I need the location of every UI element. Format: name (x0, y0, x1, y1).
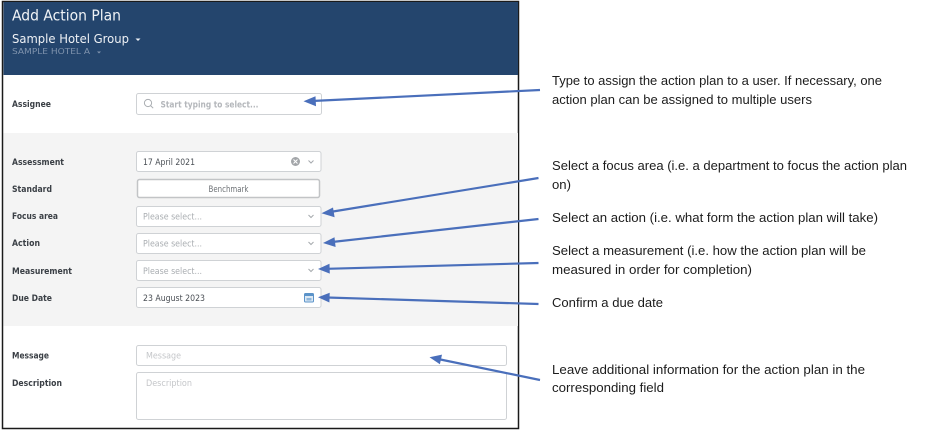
measurement row: Measurement (12, 267, 73, 277)
icon: search (144, 99, 153, 108)
measurement row: Please select... (143, 267, 202, 277)
action row: Please select... (143, 240, 202, 250)
assignee row: Assignee (12, 100, 51, 110)
note: focus area (552, 159, 907, 192)
panel: add action plan form (2, 2, 518, 428)
message row: Message (12, 352, 49, 362)
arrow: measurement (318, 263, 538, 274)
note: measurement: Select a measurement (i.e. how the action plan will be (552, 244, 866, 258)
note: focus area: on) (552, 178, 571, 192)
icon: calendar (304, 294, 314, 302)
note: assignee: action plan can be assigned to multiple users (552, 93, 812, 107)
hotel selector: SAMPLE HOTEL A (12, 47, 91, 56)
message row (12, 346, 506, 366)
note: measurement (552, 244, 866, 277)
arrow: due date (318, 293, 538, 304)
note: due date: Confirm a due date (552, 296, 663, 310)
action row: Action (12, 239, 40, 249)
note: assignee (552, 74, 882, 107)
grey section (4, 133, 518, 326)
action row (12, 234, 321, 254)
measurement row (12, 260, 321, 280)
standard row: Benchmark (208, 185, 249, 195)
heading: Add Action Plan: Add Action Plan (12, 6, 121, 24)
focus area row: Focus area (12, 212, 58, 222)
assessment row: 17 April 2021 (143, 158, 195, 168)
note: assignee: Type to assign the action plan to a user. If necessary, one (552, 74, 882, 88)
standard row: Standard (12, 185, 52, 195)
note: measurement: measured in order for completion) (552, 263, 752, 277)
note: message and description (552, 363, 865, 395)
hotel group selector: Sample Hotel Group (12, 31, 129, 46)
assignee row (12, 94, 322, 114)
assignee row: Start typing to select... (160, 100, 258, 110)
focus area row (12, 206, 321, 226)
arrow: action (323, 219, 538, 247)
focus area row: Please select... (143, 212, 202, 222)
assessment row: Assessment (12, 158, 65, 168)
note: message and description: Leave additional information for the action plan in the (552, 363, 865, 377)
arrow: message (430, 355, 540, 380)
message row: Message (146, 352, 181, 362)
arrow: assignee (304, 90, 540, 106)
description row: Description (12, 379, 62, 389)
description row (12, 372, 506, 420)
due date row: Due Date (12, 294, 52, 304)
standard row (12, 180, 320, 198)
header band (4, 2, 518, 75)
arrow: focus area (322, 178, 538, 217)
description row: Description (146, 379, 192, 389)
note: action: Select an action (i.e. what form the action plan will take) (552, 211, 878, 225)
due date row: 23 August 2023 (143, 294, 205, 304)
note: focus area: Select a focus area (i.e. a department to focus the action plan (552, 159, 907, 173)
note: message and description: corresponding field (552, 381, 664, 395)
due date row (12, 288, 321, 308)
assessment row (12, 152, 321, 172)
